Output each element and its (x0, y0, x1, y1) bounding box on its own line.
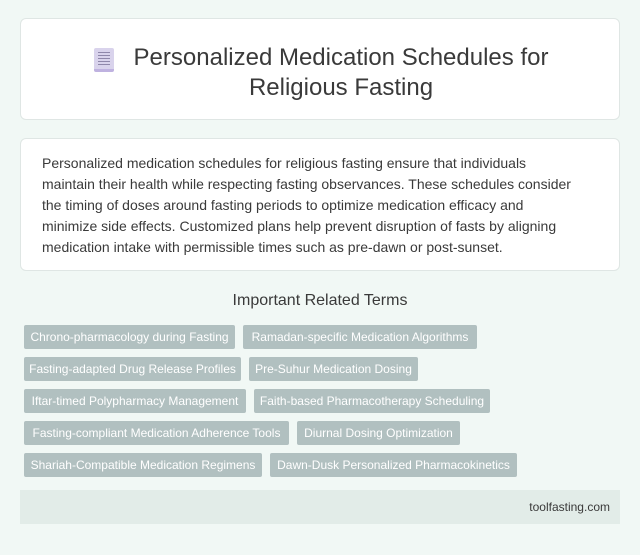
tags: Fasting-adapted Drug Release Profiles (29, 362, 236, 376)
tags: Faith-based Pharmacotherapy Scheduling (260, 394, 484, 408)
tags: Fasting-compliant Medication Adherence Tools (33, 426, 280, 440)
tags: Shariah-Compatible Medication Regimens (31, 458, 255, 472)
description text: maintain their health while respecting fasting observances. These schedules consider (42, 176, 571, 192)
tags: Ramadan-specific Medication Algorithms (252, 330, 468, 344)
footer (20, 490, 620, 524)
tags: Diurnal Dosing Optimization (304, 426, 453, 440)
title: Personalized Medication Schedules for Religious Fasting (134, 44, 548, 101)
title card (20, 18, 620, 120)
description card (20, 138, 620, 271)
description text: minimize side effects. Customized plans help prevent disruption of fasts by aligning (42, 218, 556, 234)
description text: Personalized medication schedules for religious fasting ensure that individuals (42, 155, 526, 171)
icon: scroll (94, 48, 114, 72)
tags: Dawn-Dusk Personalized Pharmacokinetics (277, 458, 510, 472)
tags: Iftar-timed Polypharmacy Management (32, 394, 238, 408)
heading: related terms: Important Related Terms (233, 292, 407, 309)
description text: the timing of doses around fasting periods to optimize medication efficacy and (42, 197, 523, 213)
description text (42, 155, 571, 255)
footer text: toolfasting.com (529, 500, 610, 514)
tags: Chrono-pharmacology during Fasting (30, 330, 229, 344)
description text: medication intake with permissible times such as pre-dawn or post-sunset. (42, 239, 503, 255)
tags: Pre-Suhur Medication Dosing (255, 362, 412, 376)
